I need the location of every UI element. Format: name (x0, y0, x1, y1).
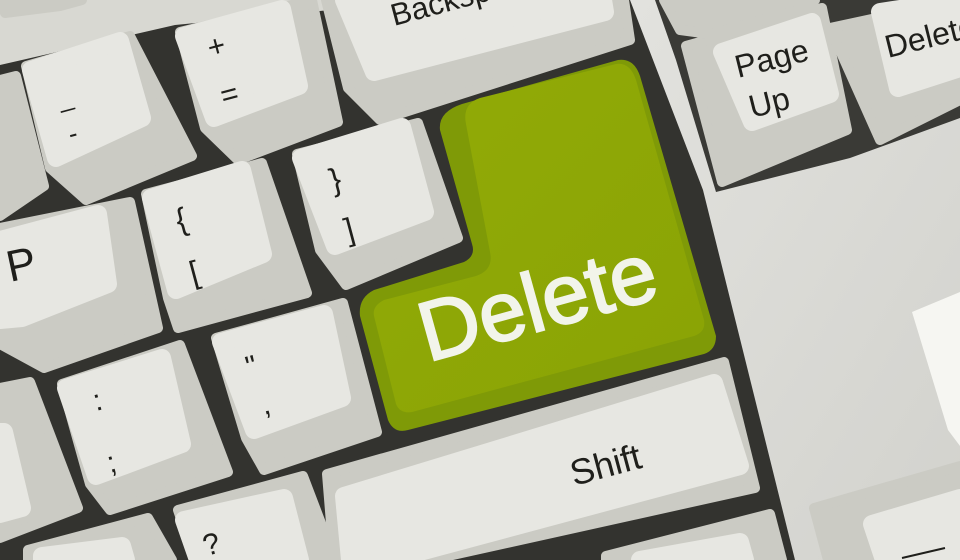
key: open brace: [ (185, 254, 203, 291)
key: close brace: ] (340, 211, 358, 248)
key: left edge (0, 0, 82, 216)
key: close brace (297, 123, 458, 285)
key: close brace: } (325, 161, 345, 198)
key: P: P (2, 238, 41, 292)
key: P (0, 202, 158, 368)
key: quote: , (257, 388, 274, 422)
key: minus: _ (53, 81, 76, 114)
key: page up (686, 8, 847, 182)
key: colon: : (89, 384, 106, 418)
key: right edge bright (912, 292, 960, 446)
key: minus (26, 36, 192, 200)
key: minus: - (65, 118, 81, 149)
key: plus: = (217, 77, 242, 113)
key: plus: + (204, 29, 229, 65)
key: shift (327, 362, 755, 560)
key: colon (62, 345, 228, 510)
key: shift: Shift (565, 435, 646, 494)
key: page up: Page (731, 32, 812, 85)
key: quote: " (242, 350, 261, 384)
key: green delete: Delete (408, 224, 667, 379)
key: lower right partial (606, 514, 782, 560)
key: plus (180, 0, 338, 160)
key: backspace (326, 0, 630, 120)
key: top right (664, 0, 960, 140)
key: lower left partial keys (0, 382, 172, 560)
key: green delete (360, 60, 716, 431)
key: open brace (146, 163, 307, 328)
key: open brace: { (171, 201, 191, 238)
key: quote (216, 303, 377, 470)
key: question mark (178, 476, 335, 560)
key: bottom right arrow (814, 466, 960, 560)
key: colon: ; (103, 446, 120, 480)
key: page up: Up (745, 80, 793, 125)
